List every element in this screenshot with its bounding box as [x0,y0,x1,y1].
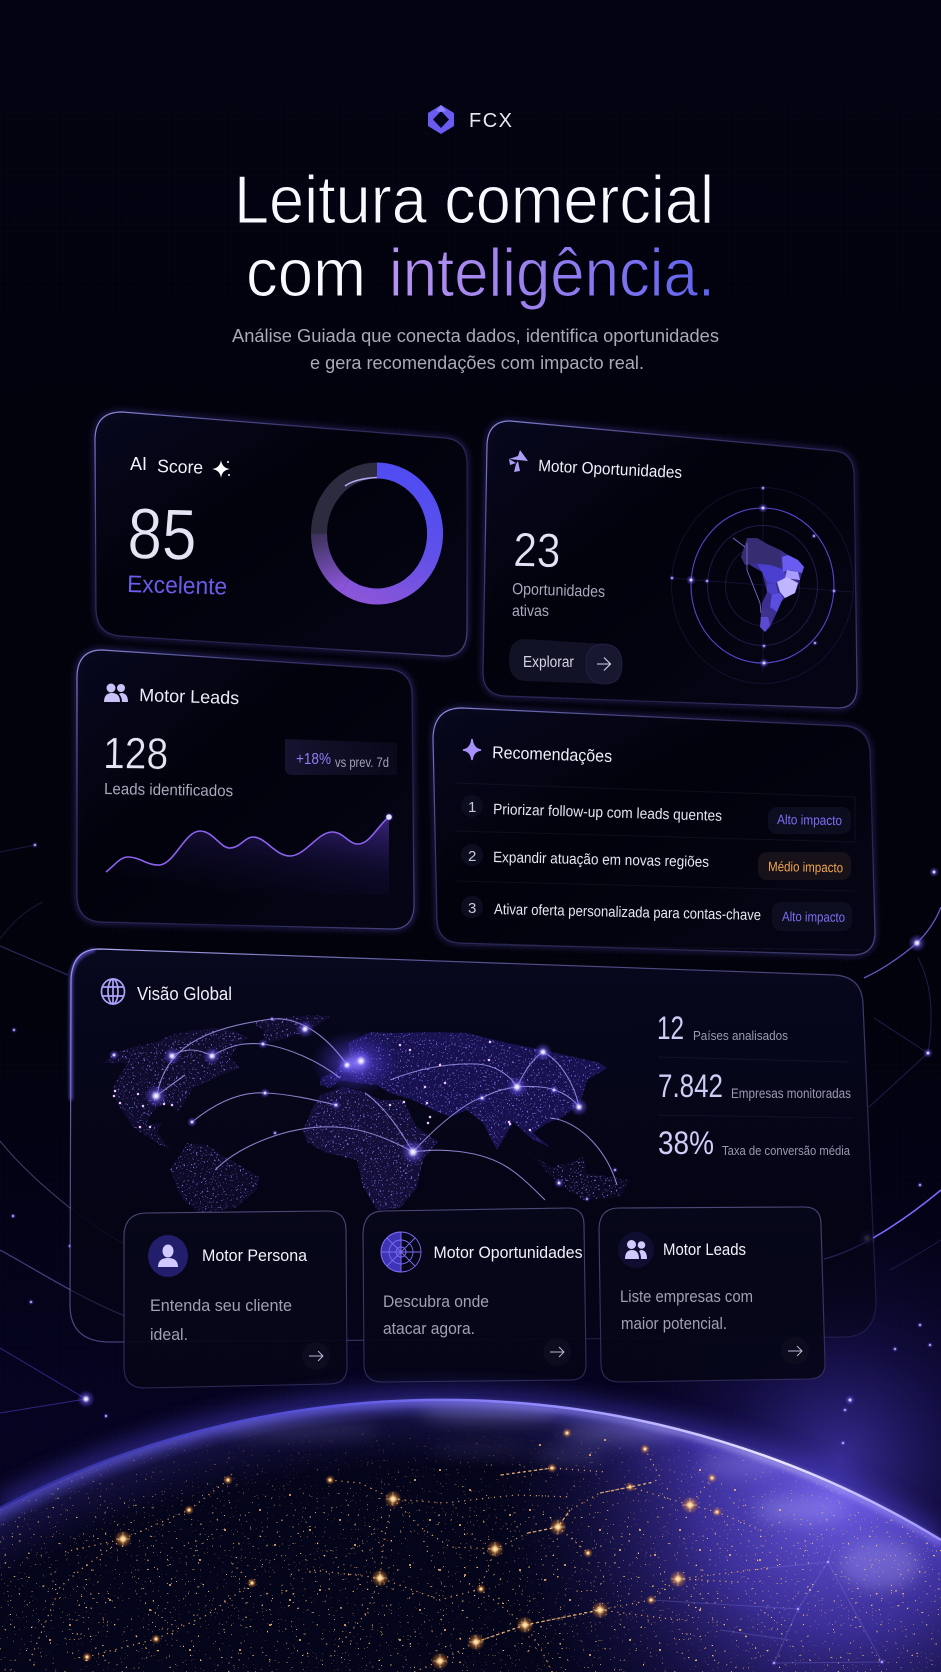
metric label: Oportunidades [512,581,605,601]
world map [103,1015,630,1215]
metric: 23: 23 [513,524,561,578]
row 3 [461,896,852,931]
row 1: 1 [468,799,476,816]
metric: 128: 128 [103,729,169,779]
row 3: Alto impacto [782,909,845,925]
description: atacar agora. [383,1319,475,1338]
badge: +18%: +18% [296,751,331,768]
panel: Recomendações [433,708,875,955]
bright limb [0,1400,941,1543]
icon: sparkle [463,739,481,760]
description [620,1287,753,1333]
icon: radar [381,1232,421,1272]
map nodes [109,1016,618,1202]
stat: países: Países analisados [693,1028,788,1043]
subtitle: Análise Guiada que conecta dados, identifica oportunidades [232,325,719,346]
panel: Motor Oportunidades [483,421,857,708]
icon: people [618,1232,654,1268]
metric label: Excelente: Excelente [127,571,228,601]
label: AI Score [130,454,230,478]
button: Explorar: Explorar [523,654,574,671]
road network [30,1449,768,1672]
bright road segments [476,1468,654,1642]
stat: conversão: 38% [658,1125,714,1161]
scattered city texture [0,1400,941,1672]
scattered bright lights [50,1440,810,1655]
row 3: Ativar oferta personalizada para contas-chave [494,901,761,924]
metric label: Leads identificados [104,781,233,800]
description: ideal. [150,1325,188,1344]
card: Motor Persona [124,1211,347,1388]
donut chart [319,470,435,596]
arrow [543,1338,571,1366]
icon: persona [148,1235,188,1277]
heading: Motor Oportunidades [538,457,683,482]
panel: Visão Global [70,949,876,1342]
stat: empresas: 7.842 [658,1068,723,1104]
planet body [0,1400,941,1672]
heading: Motor Persona [202,1246,308,1265]
icon: propeller [509,450,528,472]
metric label [512,581,605,620]
description: Entenda seu cliente [150,1296,292,1315]
badge: +18% [285,739,397,775]
label: AI Score: AI [130,454,147,474]
row 2 [461,844,851,880]
background network lines [0,845,941,1413]
description [150,1296,292,1344]
network lines [651,1543,882,1663]
stat: empresas [658,1068,851,1104]
row 1: Priorizar follow-up com leads quentes [493,801,722,825]
title: com [246,235,366,311]
badge: +18%: vs prev. 7d [335,755,389,770]
logo: FCX [428,105,512,134]
stat: países [657,1010,788,1046]
row dividers [456,783,860,950]
stat: conversão: Taxa de conversão média [722,1143,851,1158]
metric: 85: 85 [127,494,198,576]
icon: globe [102,979,124,1004]
panel: AI Score [95,412,467,656]
subtitle [232,325,719,373]
heading: Motor Leads [663,1240,746,1259]
connection arcs [156,1019,617,1200]
planet earth with city lights [0,1390,941,1672]
row 2: Expandir atuação em novas regiões [493,849,709,871]
heading: Recomendações [492,743,612,766]
map dot texture [103,1015,630,1215]
stat: países: 12 [657,1010,684,1046]
title: inteligência. [389,235,715,311]
stat: empresas: Empresas monitoradas [731,1086,851,1101]
heading: Motor Leads [139,685,239,708]
city hubs [82,1428,885,1670]
row 1: Alto impacto [777,812,842,828]
icon: people [104,684,128,702]
heading: Motor Oportunidades [434,1243,582,1262]
radar map: Brazil [669,485,854,684]
metric label: ativas [512,603,549,620]
stats [657,1010,852,1161]
button: Explorar [509,639,622,684]
row 3: 3 [468,900,476,917]
atmosphere glow [0,1400,941,1540]
row 1 [461,795,851,834]
panel: Motor Leads [77,650,414,929]
description [383,1292,489,1338]
title [234,162,715,311]
description: Descubra onde [383,1292,489,1311]
arrow [781,1337,809,1365]
clouds [220,1402,920,1589]
arrow [302,1342,330,1370]
row 2: 2 [468,848,476,865]
row 2: Médio impacto [768,859,843,875]
Europe glow [311,1031,399,1095]
heading: Visão Global [137,984,232,1004]
background glowing dots [10,842,939,1446]
line chart [106,812,394,895]
label: AI Score: Score [157,456,204,478]
card: Motor Leads mini [599,1207,825,1382]
stat: conversão [658,1125,851,1161]
description: Liste empresas com [620,1287,753,1306]
subtitle: e gera recomendações com impacto real. [310,352,644,373]
continents [103,1015,630,1215]
card: Motor Oportunidades mini [363,1208,586,1382]
icon: hexagon mark [428,105,454,134]
title: Leitura comercial [234,162,714,238]
description: maior potencial. [621,1314,727,1333]
logo: FCX: FCX [469,110,512,132]
